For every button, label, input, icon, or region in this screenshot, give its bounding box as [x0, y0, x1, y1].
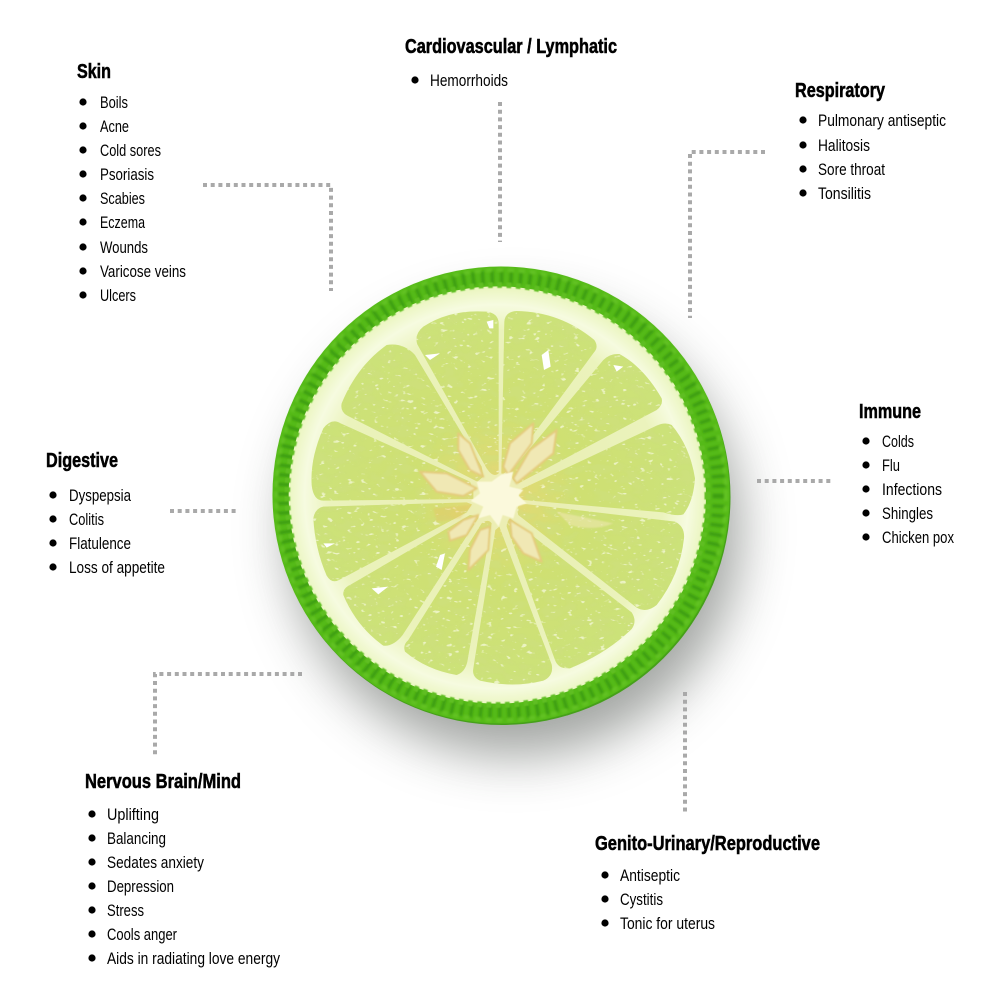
list: skin: Ulcers	[100, 287, 136, 305]
heading: respiratory: Respiratory	[795, 80, 886, 102]
list: respiratory	[799, 112, 946, 203]
list: digestive	[49, 487, 165, 577]
connector: immune	[757, 479, 834, 483]
list: immune: Flu	[882, 457, 900, 475]
connector: skin	[203, 185, 331, 291]
list: nervous: Depression	[107, 878, 174, 896]
panel: genito-urinary / reproductive	[595, 833, 820, 933]
list: nervous	[88, 806, 281, 968]
list: respiratory: Sore throat	[818, 161, 885, 179]
list: skin: Boils	[100, 94, 128, 112]
list: immune: Shingles	[882, 505, 933, 523]
list: skin	[79, 94, 186, 305]
list: respiratory: Halitosis	[818, 137, 870, 155]
heading: nervous: Nervous Brain/Mind	[85, 771, 241, 793]
list: digestive: Loss of appetite	[69, 559, 165, 577]
panel: immune	[859, 401, 955, 547]
connector: cardiovascular	[498, 102, 502, 242]
fruit segments	[307, 305, 700, 692]
list: skin: Scabies	[100, 190, 145, 208]
list: genito-urinary: Cystitis	[620, 891, 663, 909]
list: genito-urinary	[601, 867, 715, 933]
list: immune: Chicken pox	[882, 529, 955, 547]
panel: respiratory	[795, 80, 946, 203]
list: nervous: Uplifting	[107, 806, 159, 824]
panel: lime slice illustration	[272, 266, 740, 756]
fruit side edge	[274, 269, 730, 725]
list: nervous: Cools anger	[107, 926, 177, 944]
connector: nervous	[155, 674, 302, 758]
heading: digestive: Digestive	[46, 450, 118, 472]
drop shadow	[288, 304, 740, 756]
list: immune: Infections	[882, 481, 942, 499]
connector: genito-urinary	[683, 692, 687, 814]
list: skin: Psoriasis	[100, 166, 154, 184]
list: skin: Varicose veins	[100, 263, 186, 281]
panel: digestive	[46, 450, 165, 577]
list: nervous: Sedates anxiety	[107, 854, 205, 872]
list: digestive: Flatulence	[69, 535, 131, 553]
connector: respiratory	[690, 152, 765, 318]
panel: cardiovascular / lymphatic	[405, 36, 617, 90]
list: nervous: Stress	[107, 902, 144, 920]
list: cardiovascular	[411, 72, 508, 90]
list: digestive: Dyspepsia	[69, 487, 132, 505]
green rind	[272, 266, 730, 724]
list: cardiovascular: Hemorrhoids	[430, 72, 508, 90]
list: immune	[862, 433, 955, 547]
white pith	[287, 285, 707, 705]
list: skin: Eczema	[100, 214, 146, 232]
list: respiratory: Pulmonary antiseptic	[818, 112, 946, 130]
list: respiratory: Tonsilitis	[818, 185, 871, 203]
list: skin: Acne	[100, 118, 129, 136]
list: nervous: Aids in radiating love energy	[107, 950, 281, 968]
panel: skin	[77, 61, 186, 305]
list: nervous: Balancing	[107, 830, 166, 848]
connector: digestive	[170, 509, 238, 513]
centre pith	[471, 472, 527, 527]
heading: cardiovascular: Cardiovascular / Lymphatic	[405, 36, 617, 58]
heading: immune: Immune	[859, 401, 921, 423]
list: immune: Colds	[882, 433, 914, 451]
seeds	[420, 423, 613, 570]
list: genito-urinary: Antiseptic	[620, 867, 680, 885]
panel: nervous brain/mind	[85, 771, 281, 968]
list: skin: Wounds	[100, 239, 148, 257]
pulp highlights	[323, 320, 623, 594]
list: digestive: Colitis	[69, 511, 104, 529]
list: genito-urinary: Tonic for uterus	[620, 915, 715, 933]
heading: genito-urinary: Genito-Urinary/Reproductive	[595, 833, 820, 855]
list: skin: Cold sores	[100, 142, 161, 160]
heading: skin: Skin	[77, 61, 111, 83]
